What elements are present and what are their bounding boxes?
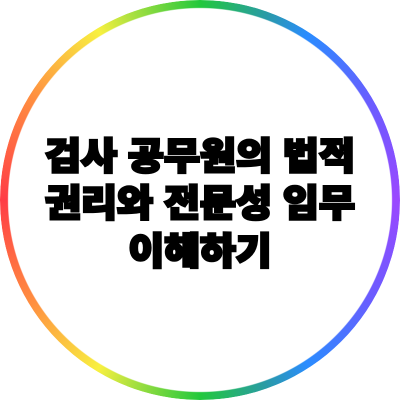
title line 3: 이해하기 xyxy=(128,231,272,272)
title line 2: 권리와 전문성 임무 xyxy=(45,183,355,224)
title line 1: 검사 공무원의 법적 xyxy=(45,136,355,177)
